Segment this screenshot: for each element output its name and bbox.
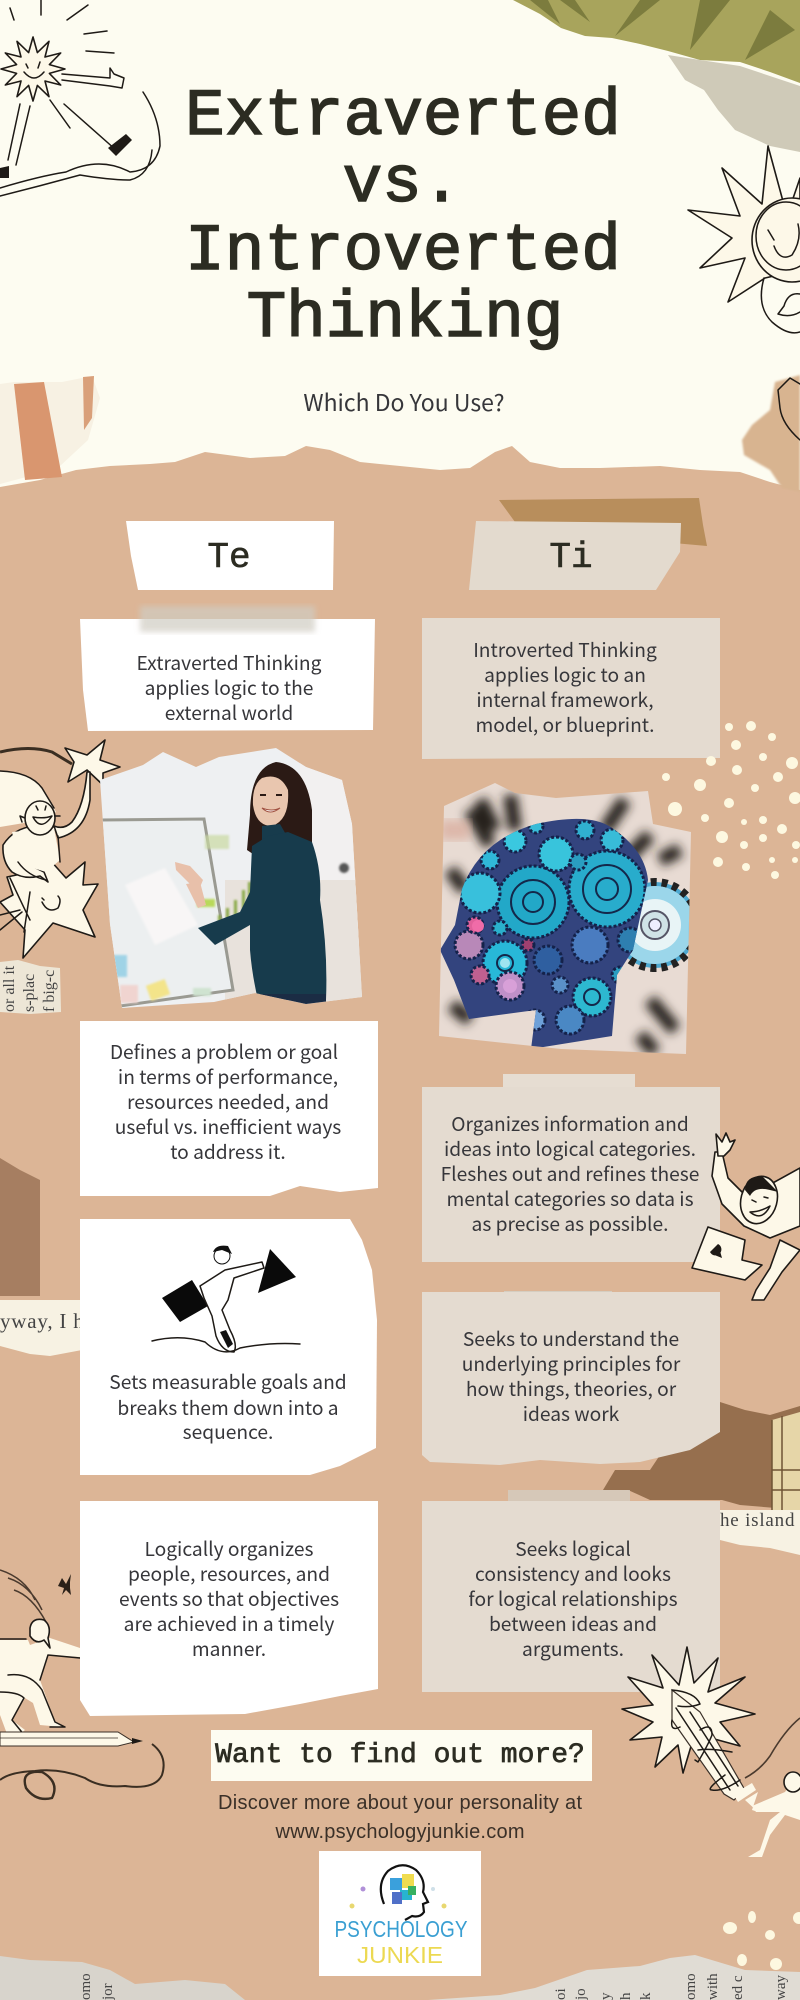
torn paper: olive landscape, top right xyxy=(513,0,800,83)
subtitle: Which Do You Use? xyxy=(303,384,505,418)
panel: Ti seeks to understand: ideas work xyxy=(523,1399,620,1427)
torn newsprint, bottom right: way xyxy=(773,1975,789,2000)
newspaper scrap: the island xyxy=(720,1510,800,1555)
panel: Te definition: external world xyxy=(165,698,293,726)
newspaper scrap, left: f big-c xyxy=(41,970,58,1012)
newspaper scrap, left: s-plac xyxy=(21,974,38,1012)
tab: Ti heading: Ti xyxy=(549,537,593,578)
torn paper: brown block, left xyxy=(0,1158,40,1296)
torn paper: striped tape, left xyxy=(0,376,100,484)
newspaper scrap: the island: he island xyxy=(720,1510,795,1531)
torn paper: beige blot, right xyxy=(742,375,800,492)
torn newsprint, bottom right: jo xyxy=(573,1988,589,2000)
photo: mechanical head with gears xyxy=(435,780,698,1060)
panel: Ti seeks to understand xyxy=(422,1291,720,1465)
torn newsprint, bottom left: omo xyxy=(78,1973,94,2000)
icon: monkey on star, left xyxy=(0,740,120,958)
torn newsprint, bottom left: jor xyxy=(100,1983,116,2000)
panel: Te defines a problem: to address it. xyxy=(170,1137,286,1165)
newspaper scrap: yway, I h xyxy=(0,1300,85,1356)
panel: Ti definition: model, or blueprint. xyxy=(476,710,654,738)
panel: Te logically organizes: events so that objectives xyxy=(119,1584,339,1612)
newspaper scrap: yway, I h: yway, I h xyxy=(0,1309,85,1333)
brown masking tape behind Ti tab xyxy=(499,498,707,546)
icon: spiky sun figure, top right xyxy=(688,146,800,333)
panel: Ti definition xyxy=(422,618,720,759)
title: Extraverted xyxy=(185,79,621,154)
panel: Ti seeks logical consistency: consistency and looks xyxy=(475,1559,671,1587)
torn newsprint, bottom right: oi xyxy=(553,1988,569,2000)
tab: Te heading: Te xyxy=(207,537,251,578)
panel: Ti definition: internal framework, xyxy=(476,685,654,713)
title xyxy=(185,79,621,356)
torn newsprint, bottom right: h xyxy=(618,1992,634,2000)
logo: Psychology Junkie: PSYCHOLOGY xyxy=(334,1916,468,1942)
decorative dots, bottom right xyxy=(723,1911,800,1970)
panel: Te definition: Extraverted Thinking xyxy=(137,648,322,676)
decorative dots, right xyxy=(662,721,800,879)
panel: Ti seeks logical consistency: for logical relationships xyxy=(468,1584,678,1612)
tab: Ti heading xyxy=(469,521,681,590)
panel: Ti seeks to understand: underlying principles for xyxy=(462,1349,681,1377)
icon: figure balancing square and triangle xyxy=(152,1246,300,1352)
panel: Ti definition: applies logic to an xyxy=(484,660,646,688)
panel: Te logically organizes xyxy=(80,1501,378,1716)
panel: Te sets measurable goals: Sets measurable goals and xyxy=(109,1367,347,1395)
icon: figure riding pencil, bottom left xyxy=(0,1570,164,1799)
panel: Te definition xyxy=(80,606,375,731)
panel: Ti seeks logical consistency: between ideas and xyxy=(489,1609,657,1637)
text: discover more xyxy=(218,1792,582,1843)
torn newsprint, bottom right: k xyxy=(638,1992,654,2000)
panel: Te sets measurable goals: breaks them down into a xyxy=(117,1393,339,1421)
panel: Te definition: applies logic to the xyxy=(145,673,313,701)
torn newsprint, bottom right: with xyxy=(705,1973,721,2000)
panel: Te logically organizes: are achieved in a timely xyxy=(124,1609,334,1637)
panel: Ti organizes information: mental categories so data is xyxy=(446,1184,694,1212)
header: torn cream paper xyxy=(0,0,800,490)
panel: Ti organizes information: Fleshes out and refines these xyxy=(441,1159,699,1187)
photo: woman at whiteboard xyxy=(95,745,365,1010)
newspaper scrap, left xyxy=(0,960,61,1014)
torn newsprint, bottom left xyxy=(0,1956,245,2000)
logo: Psychology Junkie: JUNKIE xyxy=(357,1942,443,1968)
panel: Te defines a problem xyxy=(80,1021,378,1196)
panel: Te sets measurable goals xyxy=(80,1219,377,1475)
callout: Want to find out more: Want to find out more? xyxy=(215,1740,585,1771)
torn newsprint, bottom right: ed c xyxy=(730,1975,746,2000)
torn paper: grey strip, top right xyxy=(668,55,800,152)
panel: Ti organizes information: Organizes information and xyxy=(451,1109,689,1137)
panel: Te sets measurable goals: sequence. xyxy=(183,1417,273,1445)
icon: line doodle on beige blot xyxy=(778,378,800,440)
torn paper: brown with window, right xyxy=(603,1402,800,1510)
text: discover more: Discover more about your personality at xyxy=(218,1792,582,1814)
panel: Ti organizes information: as precise as possible. xyxy=(472,1209,668,1237)
panel: Ti seeks logical consistency: arguments. xyxy=(522,1634,624,1662)
panel: Ti seeks to understand: Seeks to understand the xyxy=(463,1324,679,1352)
panel: Te defines a problem: useful vs. inefficient ways xyxy=(115,1112,341,1140)
title: Thinking xyxy=(247,281,563,356)
torn newsprint, bottom right: y xyxy=(598,1992,614,2000)
torn newsprint, bottom right xyxy=(428,1955,800,2000)
panel: Te logically organizes: Logically organizes xyxy=(144,1534,314,1562)
panel: Te defines a problem: resources needed, and xyxy=(127,1087,329,1115)
panel: Te defines a problem: in terms of performance, xyxy=(118,1062,338,1090)
panel: Ti seeks to understand: how things, theories, or xyxy=(466,1374,677,1402)
panel: Ti organizes information: ideas into logical categories. xyxy=(444,1134,696,1162)
icon: waving man with laptop, right xyxy=(692,1133,800,1300)
panel: Te logically organizes: manner. xyxy=(192,1634,266,1662)
newspaper scrap, left: or all it xyxy=(1,965,18,1012)
title: vs. xyxy=(343,146,461,221)
title: Introverted xyxy=(185,214,621,289)
torn newsprint, bottom right: omo xyxy=(683,1973,699,2000)
panel: Ti organizes information xyxy=(422,1074,720,1262)
callout: Want to find out more xyxy=(211,1730,592,1781)
logo: Psychology Junkie xyxy=(319,1851,481,1976)
panel: Te defines a problem: Defines a problem or goal xyxy=(110,1037,338,1065)
tab: Te heading xyxy=(126,521,334,590)
text: discover more: www.psychologyjunkie.com xyxy=(274,1821,524,1843)
panel: Ti seeks logical consistency xyxy=(422,1490,720,1692)
icon: sun figure, top left xyxy=(0,0,160,196)
panel: Ti seeks logical consistency: Seeks logical xyxy=(515,1534,631,1562)
icon: spiky star with pencil sword, bottom right xyxy=(622,1647,800,1857)
panel: Ti definition: Introverted Thinking xyxy=(473,635,657,663)
panel: Te logically organizes: people, resources, and xyxy=(128,1559,330,1587)
